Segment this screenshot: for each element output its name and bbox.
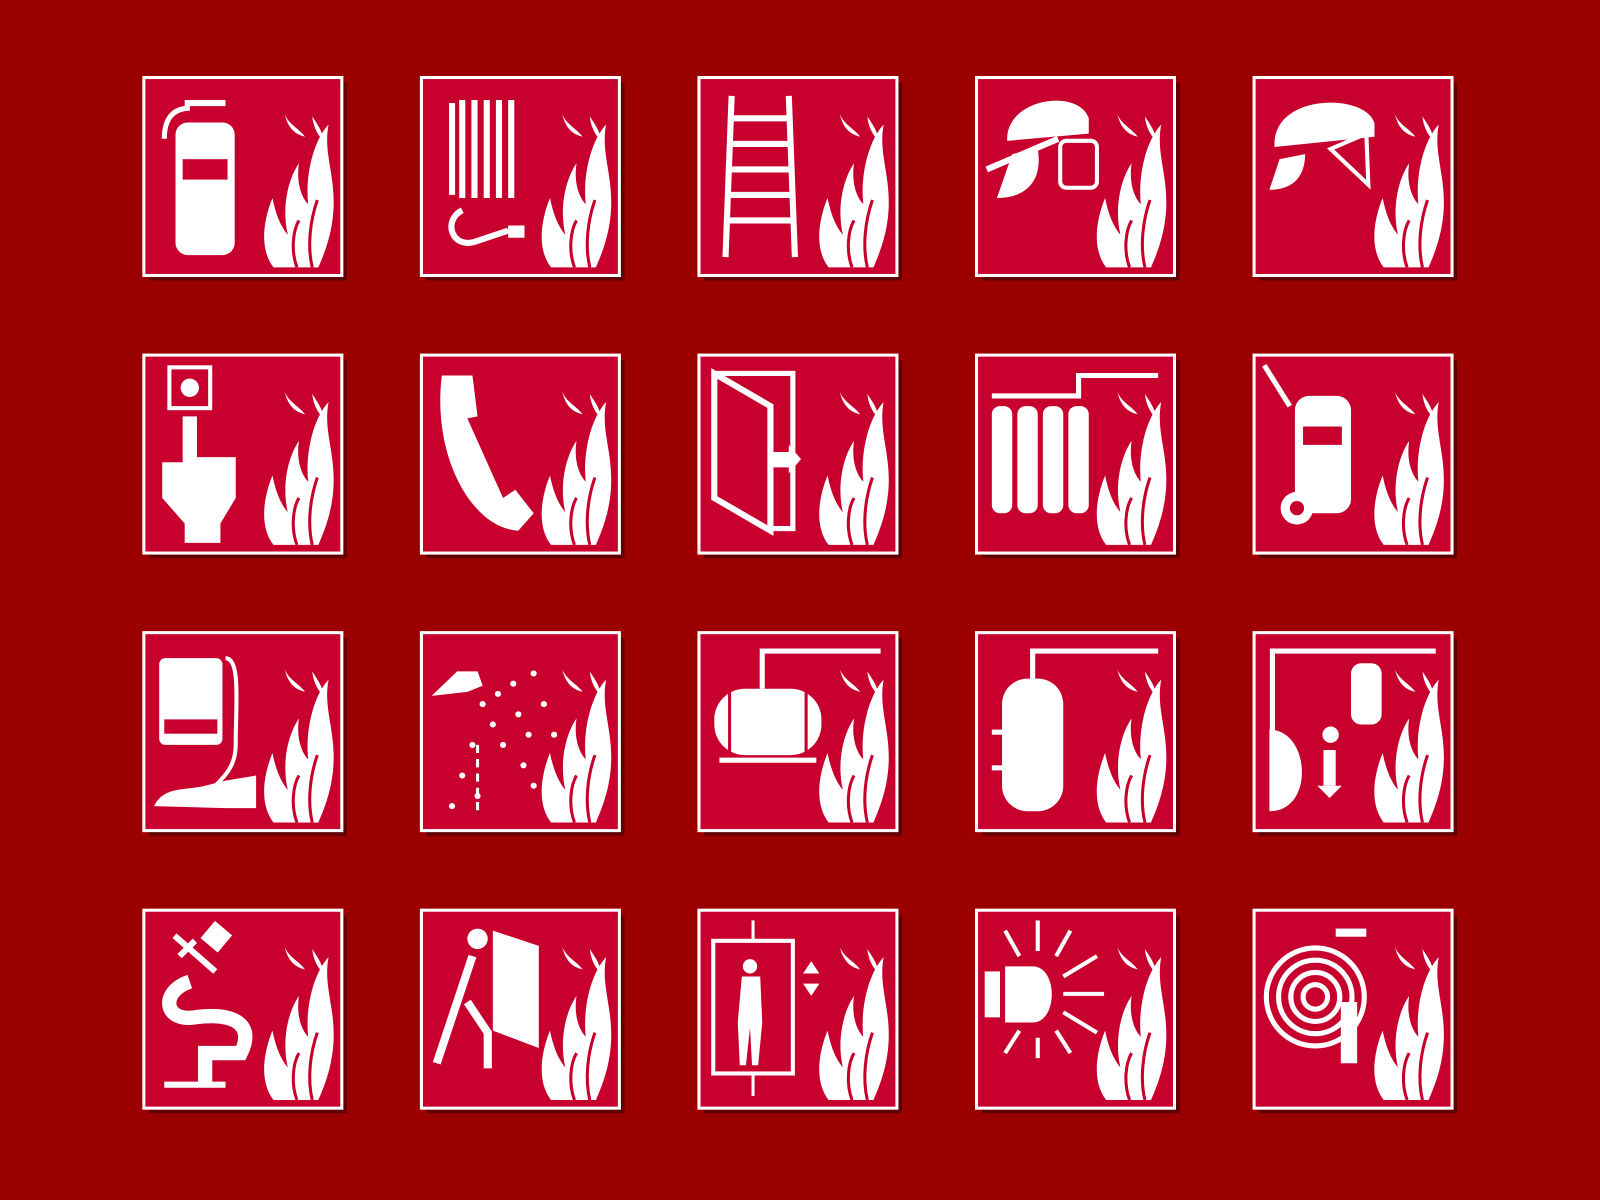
sign: helmet with visor [977,78,1180,281]
sign: wheeled extinguisher [1254,355,1457,558]
sign: horizontal tank [699,633,902,836]
sign: fire extinguisher [144,78,347,281]
sign: helmet with mask [1254,78,1457,281]
row 2 [144,355,1457,558]
sign: alarm beacon [977,910,1180,1113]
sign: hose reel [421,78,624,281]
row 1 [144,78,1457,281]
sign: firefighter lift [699,910,902,1113]
sign: ladder [699,78,902,281]
sign: sprinkler [421,633,624,836]
sign: foam unit [144,633,347,836]
sign: telephone [421,355,624,558]
sign: fixed system info [1254,633,1457,836]
sign: hose reel coil [1254,910,1457,1113]
sign: person with blanket [421,910,624,1113]
sign: manual call point [144,355,347,558]
row 3 [144,633,1457,836]
sign: fire door [699,355,902,558]
sign: cylinder bank [977,355,1180,558]
sign: single cylinder [977,633,1180,836]
row 4 [144,910,1457,1113]
sign: dry riser [144,910,347,1113]
